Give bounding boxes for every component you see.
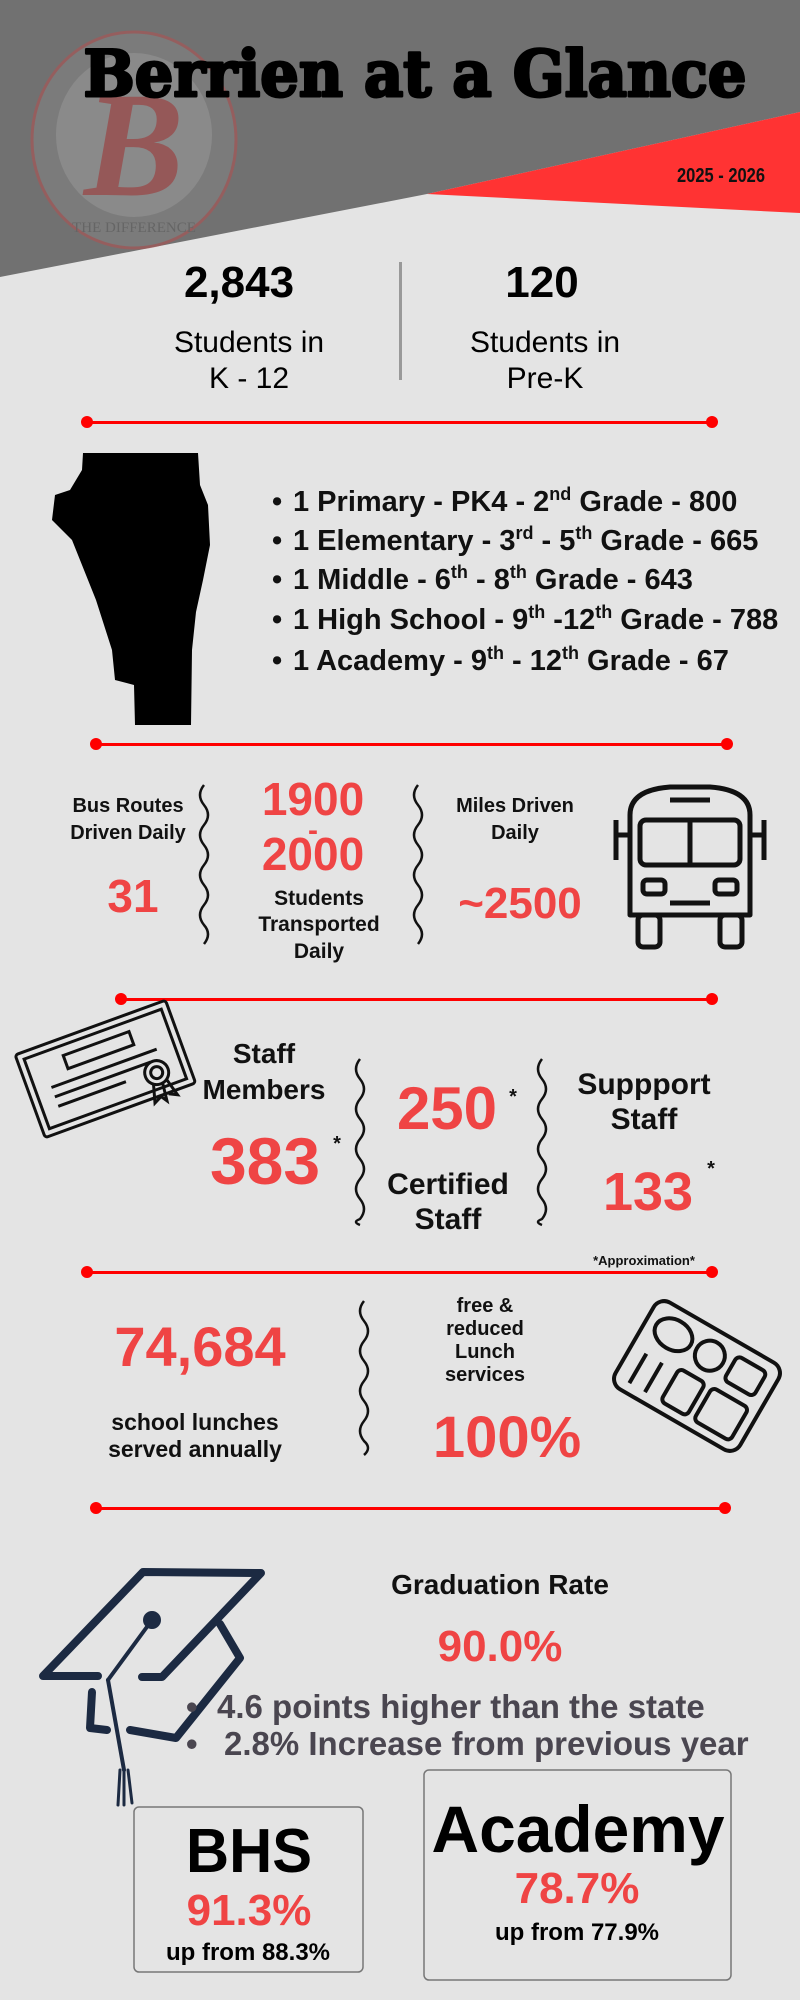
staff: certified: Staff	[415, 1203, 482, 1236]
staff: members: Members	[203, 1074, 325, 1105]
year label: 2025 - 2026	[677, 165, 765, 187]
logo: Berrien B emblem: B	[82, 62, 184, 228]
logo: Berrien B emblem: THE DIFFERENCE	[72, 220, 196, 236]
divider line 4	[81, 1266, 718, 1278]
title: Berrien at a Glance	[84, 37, 746, 112]
school list: •	[272, 525, 282, 557]
lunch: free & reduced: free &	[457, 1295, 513, 1317]
lunch: free & reduced: Lunch	[455, 1341, 515, 1363]
transport: miles driven	[456, 795, 582, 928]
school list: •	[272, 486, 282, 518]
graduation bullets	[186, 1688, 749, 1762]
school list: - 8	[468, 564, 510, 596]
school list	[272, 484, 778, 677]
transport: students transported: Daily	[294, 940, 344, 963]
transport: bus routes: Driven Daily	[70, 822, 187, 844]
transport: miles driven: Daily	[491, 822, 540, 844]
panel: Academy: 78.7%	[515, 1864, 639, 1913]
transport: bus routes	[70, 795, 187, 922]
transport: miles driven: Miles Driven	[456, 795, 574, 817]
panel: Academy: up from 77.9%	[495, 1919, 659, 1946]
graduation rate heading: Graduation Rate	[391, 1569, 609, 1600]
school list: th	[595, 602, 612, 622]
staff: members: 383	[210, 1124, 320, 1198]
lunch: free & reduced	[433, 1295, 581, 1470]
school list: - 12	[504, 645, 562, 677]
lunch: meals served: 74,684	[114, 1315, 286, 1378]
staff: certified: *	[509, 1086, 517, 1108]
transport: miles driven: ~2500	[458, 879, 582, 928]
stat: K-12 students: 2,843	[184, 258, 294, 307]
stat: Pre-K students: 120	[505, 258, 579, 307]
transport: bus routes: Bus Routes	[72, 795, 184, 817]
school list: Grade - 665	[592, 525, 758, 557]
divider line 1	[81, 416, 718, 428]
panel: BHS: BHS	[186, 1817, 312, 1886]
stat: K-12 students: Students in	[174, 326, 324, 359]
logo: Berrien B emblem	[32, 32, 236, 248]
graduation bullets: •	[186, 1725, 198, 1762]
lunch: meals served	[108, 1315, 286, 1462]
note: approximation: *Approximation*	[593, 1253, 696, 1268]
school list: nd	[549, 484, 571, 504]
school list: 1 Middle - 6	[293, 564, 451, 596]
icon: certificate	[15, 1000, 198, 1144]
panel: BHS: up from 88.3%	[166, 1939, 330, 1966]
staff: certified	[387, 1075, 517, 1236]
lunch: free & reduced: services	[445, 1364, 525, 1386]
graduation bullets: •	[186, 1688, 198, 1725]
school list: th	[510, 562, 527, 582]
school list: th	[528, 602, 545, 622]
staff: members: Staff	[233, 1038, 296, 1069]
transport: students transported: 1900	[262, 773, 364, 825]
lunch: meals served: served annually	[108, 1436, 282, 1462]
transport: students transported: Transported	[258, 913, 380, 936]
icon: graduation cap	[43, 1572, 261, 1805]
school list: th	[562, 643, 579, 663]
stat: K-12 students	[174, 258, 324, 395]
school list: th	[575, 523, 592, 543]
panel: Academy	[424, 1770, 731, 1980]
school list: 1 High School - 9	[293, 604, 528, 636]
school list: Grade - 643	[527, 564, 693, 596]
school list: th	[451, 562, 468, 582]
stat: Pre-K students	[470, 258, 620, 395]
school list: •	[272, 564, 282, 596]
divider line 5	[90, 1502, 731, 1514]
icon: lunch tray	[610, 1297, 784, 1455]
staff: members: *	[333, 1133, 341, 1155]
transport: students transported	[258, 773, 380, 963]
stat: Pre-K students: Pre-K	[507, 362, 583, 395]
transport: students transported: -	[308, 814, 318, 847]
divider line 3	[115, 993, 718, 1005]
graduation rate value: 90.0%	[438, 1622, 562, 1671]
school list: Grade - 788	[612, 604, 778, 636]
school list: 1 Academy - 9	[293, 645, 487, 677]
staff: support: *	[707, 1158, 715, 1180]
school list: •	[272, 645, 282, 677]
panel: BHS: 91.3%	[187, 1886, 311, 1935]
staff: support: Staff	[611, 1103, 678, 1136]
school list: 1 Elementary - 3	[293, 525, 515, 557]
header background	[0, 0, 800, 277]
stat: K-12 students: K - 12	[209, 362, 289, 395]
divider line 2	[90, 738, 733, 750]
transport: bus routes: 31	[107, 870, 159, 922]
staff: support	[577, 1068, 715, 1222]
panel: Academy: Academy	[432, 1792, 725, 1866]
school list: - 5	[533, 525, 575, 557]
graduation bullets: 4.6 points higher than the state	[217, 1688, 705, 1725]
school list: rd	[515, 523, 533, 543]
icon: county map	[52, 453, 210, 725]
staff: members	[203, 1038, 341, 1198]
panel: BHS	[134, 1807, 363, 1972]
staff: certified: Certified	[387, 1168, 509, 1201]
school list: 1 Primary - PK4 - 2	[293, 486, 549, 518]
graduation bullets: 2.8% Increase from previous year	[224, 1725, 749, 1762]
transport: students transported: Students	[274, 887, 364, 910]
school list: -12	[545, 604, 595, 636]
staff: certified: 250	[397, 1075, 497, 1142]
lunch: free & reduced: reduced	[446, 1318, 524, 1340]
transport: students transported: 2000	[262, 828, 364, 880]
school list: th	[487, 643, 504, 663]
staff: support: Suppport	[577, 1068, 711, 1101]
lunch: free & reduced: 100%	[433, 1405, 581, 1470]
staff: support: 133	[603, 1162, 693, 1222]
school list: •	[272, 604, 282, 636]
icon: school bus	[616, 787, 764, 947]
stat: Pre-K students: Students in	[470, 326, 620, 359]
school list: Grade - 67	[579, 645, 729, 677]
school list: Grade - 800	[571, 486, 737, 518]
lunch: meals served: school lunches	[111, 1409, 279, 1435]
